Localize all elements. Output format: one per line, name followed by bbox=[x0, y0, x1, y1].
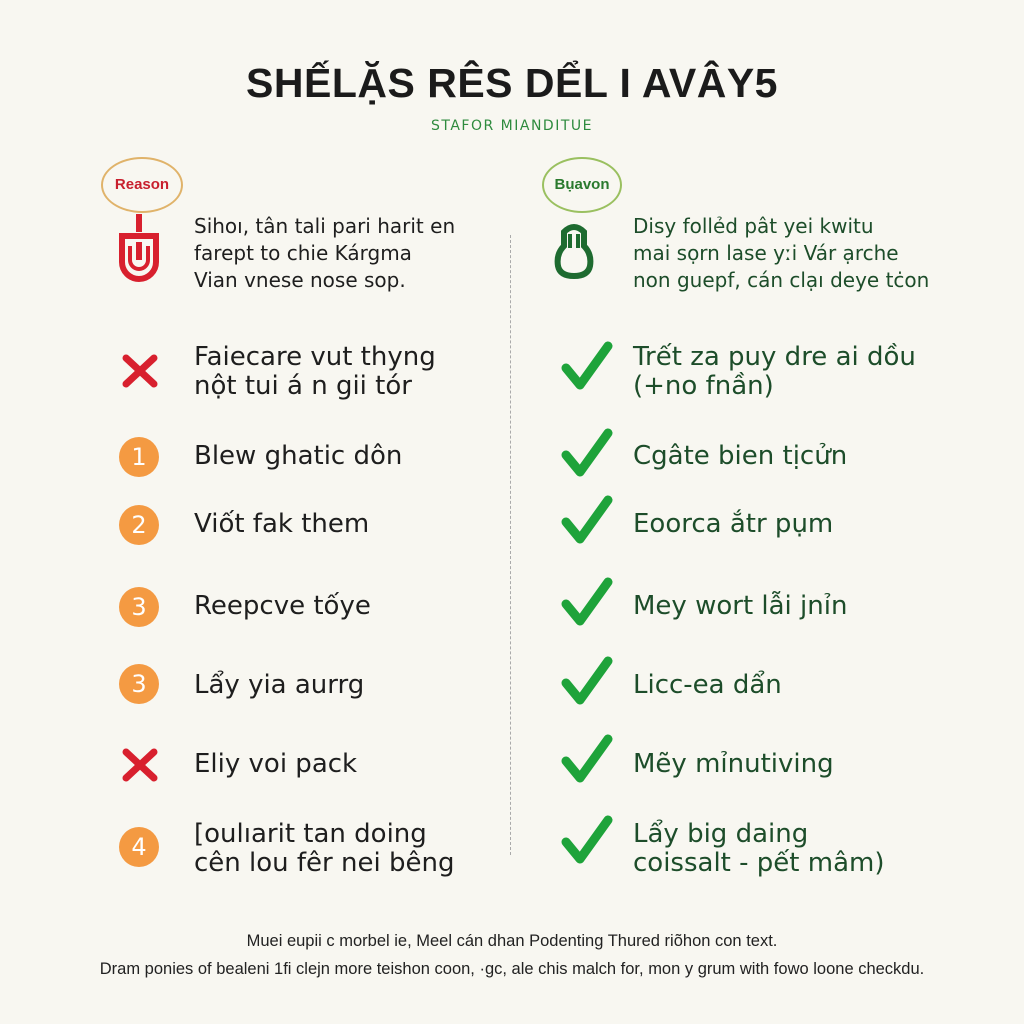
badge: Reason bbox=[101, 157, 183, 213]
footer: Dram ponies of bealeni 1fi clejn more teishon coon, ·gc, ale chis malch for, mon y grum with fowo loone checkdu. bbox=[100, 960, 924, 978]
row 2: 1 bbox=[131, 443, 147, 471]
right list bbox=[562, 342, 916, 878]
badge: Buavon: Bụavon bbox=[554, 176, 610, 193]
text: right intro bbox=[633, 214, 929, 292]
icon: green bag bbox=[554, 224, 594, 279]
row 7: 4 bbox=[131, 833, 147, 861]
right list: (+no fnần) bbox=[633, 371, 774, 401]
left list: Reepcve tốye bbox=[194, 591, 371, 621]
checks bbox=[562, 342, 612, 864]
subtitle: STAFOR MIANDITUE bbox=[431, 118, 593, 134]
icon: red plug bbox=[119, 214, 159, 282]
text: left intro: farept to chie Kárgma bbox=[194, 241, 412, 265]
right list: Lẩy big daing bbox=[633, 819, 808, 849]
right list: Eoorca ắtr pụm bbox=[633, 509, 833, 539]
right list: Mẽy mỉnutiving bbox=[633, 749, 834, 779]
left list: Lẩy yia aurrg bbox=[194, 670, 364, 700]
right list: Cgâte bien tịcửn bbox=[633, 441, 847, 471]
row 4 bbox=[119, 587, 159, 627]
footer bbox=[100, 932, 924, 978]
badge: Reason: Reason bbox=[115, 176, 169, 193]
row 3 bbox=[119, 505, 159, 545]
row 2 bbox=[119, 437, 159, 477]
row 5 bbox=[119, 664, 159, 704]
text: right intro: non guepf, cán clạı deye tċon bbox=[633, 268, 929, 292]
left list: Eliy voi pack bbox=[194, 749, 357, 779]
text: left intro: Vian vnese nose sop. bbox=[194, 268, 406, 292]
text: left intro: Sihoı, tân tali pari harit en bbox=[194, 214, 455, 238]
right list: Mey wort lẫi jnỉn bbox=[633, 591, 847, 621]
left list: Blew ghatic dôn bbox=[194, 441, 402, 471]
row 6 bbox=[122, 748, 158, 782]
row 4: 3 bbox=[131, 593, 147, 621]
footer: Muei eupii c morbel ie, Meel cán dhan Podenting Thured riõhon con text. bbox=[247, 932, 777, 950]
left list: Viốt fak them bbox=[194, 509, 369, 539]
row 5: 3 bbox=[131, 670, 147, 698]
divider bbox=[510, 235, 511, 855]
left list: nột tui á n gii tór bbox=[194, 371, 412, 401]
right list: Licc-ea dẩn bbox=[633, 670, 782, 700]
text: left intro bbox=[194, 214, 455, 292]
text: right intro: mai sọrn lase yːi Vár ạrche bbox=[633, 241, 899, 265]
title: SHẾLẶS RÊS DỂL I AVÂY5 bbox=[246, 60, 778, 106]
badge: Buavon bbox=[542, 157, 622, 213]
row 3: 2 bbox=[131, 511, 147, 539]
left list bbox=[119, 342, 454, 878]
left list: [oulıarit tan doing bbox=[194, 819, 427, 849]
right list: Trết za puy dre ai dồu bbox=[633, 342, 916, 372]
row 7 bbox=[119, 827, 159, 867]
left list: cên lou fêr nei bêng bbox=[194, 848, 454, 878]
row 1 bbox=[122, 354, 158, 388]
right list: coissalt - pết mâm) bbox=[633, 848, 884, 878]
text: right intro: Disy follẻd pât yei kwitu bbox=[633, 214, 874, 238]
left list: Faiecare vut thyng bbox=[194, 342, 436, 372]
